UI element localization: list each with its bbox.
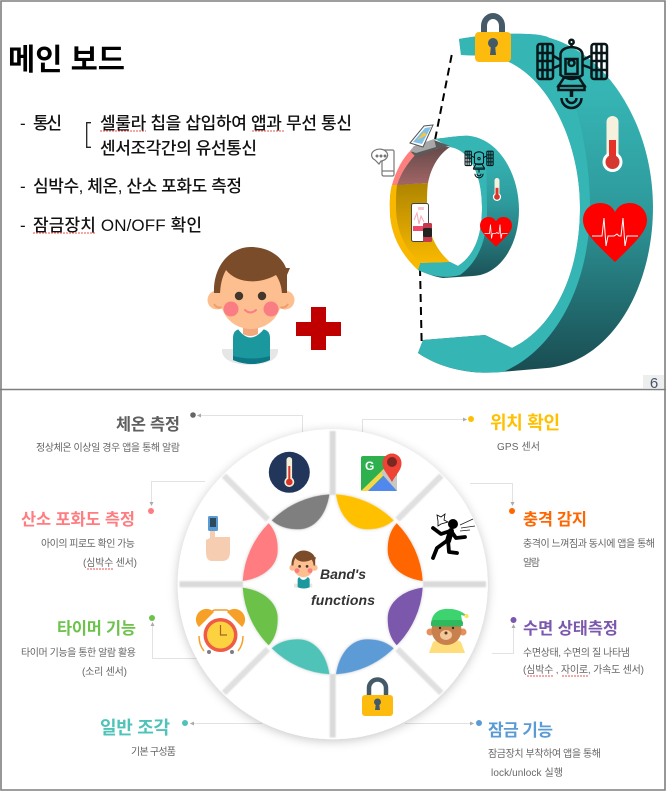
petal: grey	[272, 494, 329, 529]
panel: band functions	[21, 412, 655, 779]
icon: lock	[475, 16, 511, 62]
page number: 6	[650, 375, 658, 392]
callout: general piece: 일반 조각	[100, 718, 170, 738]
callout: sleep state: 수면 상태측정	[523, 620, 618, 638]
callout: timer: 타이머 기능	[57, 620, 136, 638]
icon: red cross	[296, 307, 341, 350]
icon: small boy	[289, 550, 318, 589]
callout: timer: (소리 센서)	[82, 666, 127, 678]
function wheel	[178, 429, 488, 739]
callout: lock function	[476, 720, 601, 779]
petal: purple	[388, 588, 423, 645]
text block: communication bullet	[20, 114, 352, 158]
icon: map device	[410, 125, 433, 147]
callout: oxygen saturation: 산소 포화도 측정	[21, 511, 135, 529]
dashed connector top	[435, 55, 452, 140]
callout: general piece: 기본 구성품	[131, 746, 176, 758]
petal: orange	[388, 523, 423, 581]
text block: measurement bullet: 심박수, 체온, 산소 포화도 측정	[33, 177, 242, 196]
connector lines	[150, 414, 516, 726]
callout: location	[468, 413, 560, 453]
icon: phone with chat	[372, 149, 394, 176]
icon: boy	[208, 247, 294, 365]
text block: communication bullet: 통신	[33, 114, 62, 133]
icon: map	[361, 454, 402, 491]
small ring	[372, 125, 519, 278]
callout: lock function: 잠금장치 부착하여 앱을 통해	[488, 747, 601, 760]
callout: sleep state	[510, 617, 644, 676]
callout: sleep state: 수면상태, 수면의 질 나타냄	[523, 647, 630, 659]
callout: location: 위치 확인	[490, 413, 560, 433]
big ring	[418, 16, 653, 373]
callout: location: GPS 센서	[497, 441, 540, 453]
icon: impact runner	[433, 514, 475, 558]
wheel centre label: Band's	[320, 566, 366, 582]
text block: lock bullet: 잠금장치 ON/OFF 확인	[33, 216, 202, 235]
callout: body temperature	[36, 412, 196, 454]
callout: oxygen saturation	[21, 508, 154, 569]
icon: heart	[583, 203, 647, 262]
text block: communication bullet: 센서조각간의 유선통신	[100, 139, 257, 158]
icon: smartphone and watch	[412, 204, 432, 242]
text block: communication bullet: 셀룰라 칩을 삽입하여 앱과 무선 통신	[100, 114, 352, 133]
callout: body temperature: 정상체온 이상일 경우 앱을 통해 알람	[36, 441, 180, 454]
icon: finger oximeter	[206, 516, 230, 561]
icon: satellite	[538, 40, 607, 108]
petal: pink	[243, 523, 278, 581]
petal: teal	[272, 639, 329, 674]
icon: thermometer badge	[269, 452, 310, 493]
title: 메인 보드	[8, 44, 125, 77]
petal: green	[243, 588, 278, 645]
icon: map: G	[365, 459, 374, 473]
text block: measurement bullet: -	[20, 177, 26, 196]
petal: yellow	[336, 494, 394, 529]
icon: small satellite	[465, 151, 493, 178]
icon: small heart	[480, 217, 512, 246]
callout: impact detection: 알람	[523, 556, 540, 569]
wheel centre label	[311, 566, 375, 608]
callout: lock function: lock/unlock 실행	[491, 767, 563, 779]
callout: lock function: 잠금 기능	[488, 721, 553, 740]
panel: main board	[0, 0, 666, 392]
callout: general piece	[100, 718, 188, 758]
callout: impact detection	[509, 508, 655, 569]
callout: timer	[21, 615, 155, 678]
icon: padlock	[362, 680, 393, 716]
icon: small thermometer	[493, 178, 501, 201]
page number	[643, 375, 664, 392]
callout: oxygen saturation: 아이의 피로도 확인 가능	[41, 538, 135, 550]
callout: impact detection: 충격 감지	[523, 511, 587, 529]
icon: sleeping child	[426, 609, 469, 653]
text block: communication bullet: -	[20, 114, 26, 133]
petal: blue	[336, 639, 394, 674]
callout: body temperature: 체온 측정	[116, 416, 180, 434]
icon: thermometer	[602, 116, 622, 172]
callout: oxygen saturation: (심박수 센서)	[83, 557, 137, 569]
callout: impact detection: 충격이 느껴짐과 동시에 앱을 통해	[523, 537, 655, 550]
callout: sleep state: (심박수 , 자이로, 가속도 센서)	[523, 664, 644, 676]
dashed connector bottom	[420, 268, 422, 345]
icon: alarm clock	[196, 609, 245, 654]
wheel centre label: functions	[311, 592, 375, 608]
callout: timer: 타이머 기능을 통한 알람 활용	[21, 646, 136, 659]
text block: lock bullet: -	[20, 216, 26, 235]
